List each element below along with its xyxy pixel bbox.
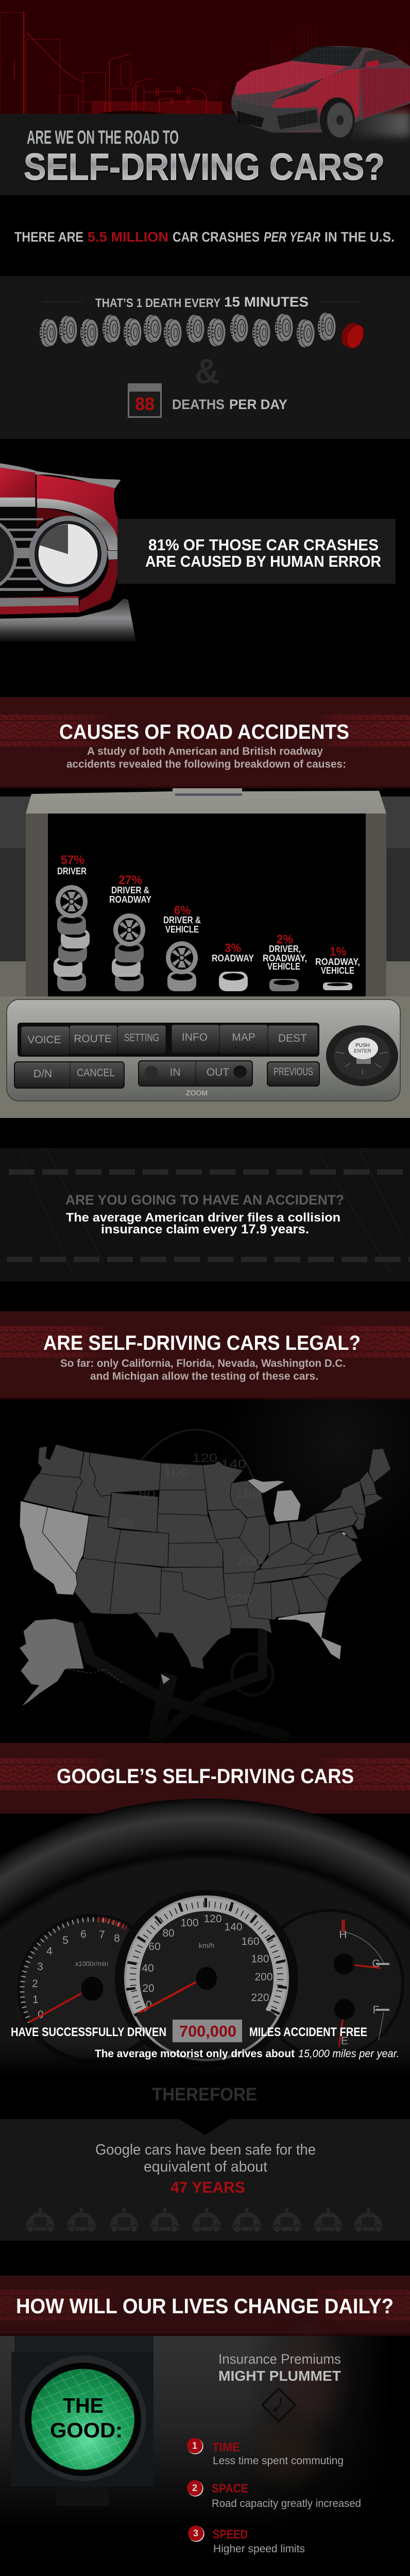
statement text: 17.9 years.: [241, 1222, 309, 1236]
gauge: tachometer: x1000r/min: [75, 1960, 108, 1968]
text: deaths per day: [172, 397, 287, 412]
map: United States with testing states highlighted: 100: [163, 1466, 189, 1479]
heading: HOW WILL OUR LIVES CHANGE DAILY?: [16, 2294, 394, 2318]
text: therefore: THEREFORE: [152, 2084, 257, 2105]
gauge: tachometer: 2: [32, 1978, 38, 1990]
control panel: buttons: ROUTE: [74, 1033, 112, 1045]
text: safe equivalent: equivalent of about: [144, 2159, 267, 2175]
control knob: push enter: PUSH: [355, 1043, 370, 1048]
statement text: insurance claim every: [101, 1223, 237, 1236]
gauge: temperature and fuel: C: [372, 1958, 380, 1970]
panel: dashboard navigation unit: [0, 788, 410, 1118]
item: time: 1: [192, 2441, 197, 2451]
item: time: Less time spent commuting: [213, 2455, 344, 2467]
gauge: speedometer: km/h: [199, 1941, 214, 1950]
chart screen: causes as tire stacks: [48, 814, 366, 996]
gauge: speedometer: 140: [224, 1921, 243, 1933]
text: crash statistic: CAR CRASHES: [173, 229, 260, 245]
gauge: speedometer: [115, 1890, 298, 2067]
gauge: speedometer: 100: [180, 1917, 199, 1929]
map: United States with testing states highlighted: 140: [221, 1458, 246, 1471]
icons: Google cars row: [26, 2208, 383, 2232]
text: safe equivalent: Google cars have been safe for the: [95, 2142, 316, 2158]
gauge: temperature and fuel: H: [339, 1929, 347, 1941]
subheading: [66, 745, 346, 770]
column: driver and roadway 27 percent: ROADWAY: [109, 894, 151, 905]
traffic light: green: [11, 2336, 153, 2506]
text: one death every 15 minutes: 15 MINUTES: [224, 294, 309, 310]
gauge: speedometer: 80: [162, 1927, 175, 1939]
column: driver roadway vehicle 2 percent: [263, 933, 307, 991]
subheading: [60, 1358, 346, 1382]
column: roadway vehicle 1 percent: [315, 945, 360, 990]
heading: ARE SELF-DRIVING CARS LEGAL?: [43, 1332, 361, 1354]
column: driver and roadway 27 percent: 27%: [118, 873, 142, 887]
column: driver and vehicle 6 percent: [163, 904, 201, 991]
text: crash statistic: IN THE U.S.: [324, 229, 395, 245]
control panel: buttons: D/N: [33, 1068, 52, 1080]
gauge: tachometer: 0: [38, 2009, 44, 2021]
panel: accident likelihood road: [0, 1148, 410, 1281]
heading: CAUSES OF ROAD ACCIDENTS: [59, 721, 349, 743]
subheading: So far: only California, Florida, Nevada, Washington D.C.: [60, 1358, 346, 1369]
column: roadway vehicle 1 percent: VEHICLE: [321, 965, 354, 976]
column: roadway 3 percent: [212, 941, 254, 991]
panel: faint steering wheel behind map: [0, 1399, 410, 1743]
steering wheel: [0, 1799, 410, 2119]
panel: legal banner: [0, 1311, 410, 1399]
gauge: tachometer: 1: [32, 1994, 39, 2006]
gauge: tachometer: 3: [37, 1961, 43, 1973]
column: driver and vehicle 6 percent: VEHICLE: [165, 924, 199, 935]
panel: Google banner: [0, 1743, 410, 1814]
panel: title block: [0, 111, 410, 195]
illustration: red wireframe sports car: [231, 46, 410, 143]
icons: row of fifteen tires: [40, 313, 367, 351]
column: driver roadway vehicle 2 percent: DRIVER,: [269, 944, 301, 954]
column: driver and vehicle 6 percent: 6%: [174, 904, 191, 918]
map: United States with testing states highlighted: 120: [192, 1451, 217, 1465]
column: driver 57 percent: DRIVER: [57, 866, 87, 876]
column: driver roadway vehicle 2 percent: 2%: [277, 933, 293, 946]
icon: calendar with 88: [128, 383, 162, 418]
control panel: buttons: CANCEL: [77, 1067, 115, 1079]
map: United States with testing states highlighted: 200: [236, 1555, 262, 1568]
statement text: The average American driver files a collision: [66, 1211, 340, 1225]
panel: 47 years equivalent: [0, 2119, 410, 2241]
text: crash statistic: [14, 229, 395, 245]
gauge: temperature and fuel: [257, 1910, 403, 2057]
text: crash statistic: THERE ARE: [14, 229, 83, 245]
ampersand: &: [195, 352, 219, 391]
item: time: [187, 2438, 344, 2467]
text: 700,000 miles accident free: HAVE SUCCESSFULLY DRIVEN: [11, 2025, 166, 2039]
column: driver and vehicle 6 percent: DRIVER &: [163, 915, 201, 925]
gauge: temperature and fuel: E: [341, 2035, 348, 2047]
map: United States with testing states highlighted: 80: [139, 1487, 156, 1501]
map: United States with testing states highlighted: 220: [226, 1592, 251, 1605]
text: average motorist: [95, 2048, 399, 2060]
item: speed: 3: [193, 2528, 198, 2538]
subheading: A study of both American and British roadway: [87, 745, 323, 757]
icon: curve sign: [262, 2388, 295, 2421]
column: driver 57 percent: 57%: [61, 853, 84, 867]
control panel: buttons: PREVIOUS: [274, 1066, 313, 1078]
text: insurance premiums: [218, 2351, 341, 2384]
panel: hero city and car: [0, 0, 410, 114]
column: driver and roadway 27 percent: DRIVER &: [111, 885, 149, 895]
illustration: wireframe city: [0, 11, 410, 114]
item: space: Road capacity greatly increased: [212, 2498, 361, 2510]
column: driver 57 percent: [54, 853, 90, 991]
text: crash statistic: 5.5 MILLION: [88, 229, 168, 245]
heading: GOOGLE’S SELF-DRIVING CARS: [57, 1765, 354, 1788]
text: insurance premiums: MIGHT PLUMMET: [218, 2368, 341, 2384]
text: 700,000 miles accident free: [11, 2020, 367, 2042]
subheading: accidents revealed the following breakdown of causes:: [66, 758, 346, 770]
item: time: TIME: [212, 2441, 240, 2454]
panel: daily change banner: [0, 2276, 410, 2336]
item: space: [187, 2480, 361, 2510]
text: 700,000 miles accident free: MILES ACCIDENT FREE: [249, 2025, 367, 2039]
item: speed: [188, 2526, 305, 2555]
text: one death every 15 minutes: THAT’S 1 DEATH EVERY: [95, 296, 220, 310]
item: space: SPACE: [212, 2482, 248, 2496]
control panel: buttons: VOICE: [27, 1034, 61, 1046]
column: driver and roadway 27 percent: [109, 873, 151, 991]
control panel: buttons: DEST: [278, 1032, 307, 1044]
text: deaths per day: PER DAY: [229, 397, 287, 412]
control knob: push enter: ENTER: [354, 1048, 371, 1054]
control panel: buttons: OUT: [207, 1066, 229, 1078]
illustration: steering wheel and instrument cluster: [0, 1799, 410, 2119]
text: 700,000 miles accident free: 700,000: [179, 2022, 236, 2040]
illustration: classic red car front with headlight pie: [0, 463, 139, 650]
icon: calendar with 88: 88: [135, 394, 155, 414]
column: driver roadway vehicle 2 percent: VEHICLE: [267, 961, 300, 972]
control panel: buttons: IN: [170, 1066, 180, 1078]
gauge: speedometer: 0: [146, 1999, 152, 2011]
gauge: speedometer: 220: [251, 1992, 269, 2004]
map: United States with testing states highlighted: 60: [116, 1516, 133, 1530]
panel: deaths: [0, 276, 410, 439]
column: roadway 3 percent: 3%: [225, 941, 241, 955]
text: average motorist: 15,000 miles per year.: [298, 2048, 399, 2060]
gauge: tachometer: 4: [46, 1945, 53, 1957]
control panel: buttons: INFO: [182, 1031, 208, 1043]
text: deaths per day: DEATHS: [172, 397, 225, 412]
gauge: tachometer: 6: [80, 1928, 87, 1940]
panel: causes of road accidents banner: [0, 697, 410, 788]
gauge: tachometer: 8: [114, 1933, 120, 1944]
callout: 81 percent human error: [117, 519, 396, 584]
gauge: speedometer: 180: [251, 1953, 269, 1965]
text: insurance premiums: Insurance Premiums: [218, 2351, 341, 2367]
control panel: buttons: [0, 996, 410, 1118]
map: United States with testing states highlighted: 160: [235, 1486, 261, 1500]
title kicker: ARE WE ON THE ROAD TO: [27, 127, 179, 148]
control panel: buttons: MAP: [232, 1031, 255, 1043]
gauge: speedometer: 200: [254, 1971, 273, 1983]
statement text: [66, 1211, 340, 1236]
number: 47 years: 47 YEARS: [170, 2178, 245, 2196]
item: speed: Higher speed limits: [213, 2543, 305, 2555]
control panel: buttons: ZOOM: [186, 1089, 208, 1097]
gauge: tachometer: 7: [99, 1929, 105, 1941]
column: roadway vehicle 1 percent: ROADWAY,: [315, 957, 360, 967]
callout: 81 percent human error: 81% OF THOSE CAR CRASHES: [148, 536, 379, 554]
panel: the good: [0, 2334, 410, 2576]
gauge: tachometer: [17, 1913, 167, 2064]
item: space: 2: [192, 2483, 197, 2493]
gauge: speedometer: 120: [203, 1913, 222, 1925]
traffic light: green: THE: [63, 2394, 104, 2417]
traffic light: green: GOOD:: [50, 2418, 123, 2442]
callout: 81 percent human error: ARE CAUSED BY HUMAN ERROR: [145, 552, 381, 570]
column: roadway vehicle 1 percent: 1%: [330, 945, 346, 959]
gauge: tachometer: 5: [62, 1935, 69, 1946]
subheading: and Michigan allow the testing of these cars.: [90, 1370, 318, 1382]
gauge: speedometer: 160: [241, 1936, 260, 1947]
text: safe equivalent: [95, 2142, 316, 2175]
text: average motorist: The average motorist only drives about: [95, 2048, 295, 2060]
item: speed: SPEED: [213, 2528, 248, 2541]
column: roadway 3 percent: ROADWAY: [212, 953, 254, 963]
gauge: temperature and fuel: F: [373, 2004, 379, 2016]
question heading: ARE YOU GOING TO HAVE AN ACCIDENT?: [65, 1192, 344, 1208]
control panel: buttons: SETTING: [124, 1032, 159, 1044]
text: crash statistic: PER YEAR: [264, 229, 320, 245]
gauge: speedometer: 20: [142, 1982, 155, 1994]
column: driver roadway vehicle 2 percent: ROADWAY,: [263, 953, 307, 963]
shroud fading to black: [0, 2040, 410, 2076]
gauge: speedometer: 60: [148, 1941, 161, 1953]
control knob: push enter: [326, 1025, 398, 1086]
map: United States with testing states highlighted: [20, 1444, 391, 1706]
text: one death every 15 minutes: [43, 294, 360, 310]
gauge: speedometer: 40: [142, 1962, 154, 1974]
